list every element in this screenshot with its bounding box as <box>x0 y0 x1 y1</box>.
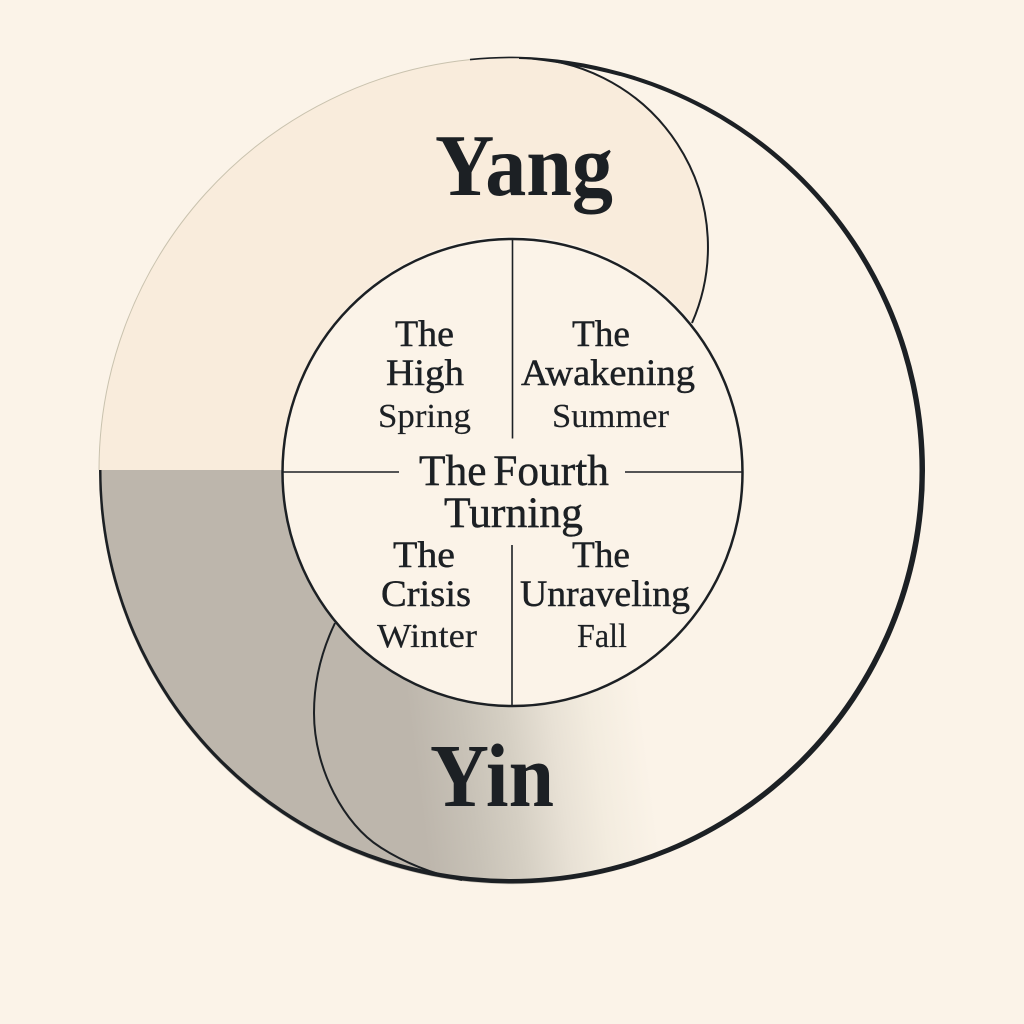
label: The High, Spring: The <box>395 314 454 355</box>
label: The High, Spring: Spring <box>378 398 471 435</box>
outer ring: heavy stroke <box>99 58 925 884</box>
label: The High, Spring: High <box>386 353 465 394</box>
center title: The Fourth Turning: The Fourth <box>419 448 609 495</box>
outer ring: thin upper left edge <box>99 60 470 470</box>
label: The High, Spring <box>378 314 471 435</box>
center title: The Fourth Turning: Turning <box>444 490 583 537</box>
label: The Awakening, Summer: The <box>572 314 630 355</box>
label: The Crisis, Winter: Crisis <box>381 574 471 615</box>
label: The Crisis, Winter: The <box>393 535 455 576</box>
label: The Unraveling, Fall: Fall <box>577 618 627 655</box>
inner circle <box>282 239 742 706</box>
center title: The Fourth Turning <box>419 448 609 537</box>
outer ring: top join <box>470 57 519 60</box>
label: The Awakening, Summer <box>521 314 695 435</box>
outer ring: tapered start of heavy stroke <box>519 57 620 76</box>
panel: yin region <box>99 470 720 884</box>
label: The Unraveling, Fall: Unraveling <box>520 574 690 615</box>
label: The Unraveling, Fall <box>520 535 690 655</box>
panel: yang region <box>99 57 708 470</box>
quadrant dividers <box>283 239 742 706</box>
heading: Yang: Yang <box>435 118 613 215</box>
heading: Yin: Yin <box>430 727 554 826</box>
label: The Crisis, Winter: Winter <box>377 618 478 655</box>
label: The Awakening, Summer: Awakening <box>521 353 695 394</box>
label: The Crisis, Winter <box>377 535 478 655</box>
diagram: yin yang cycle of the four turnings <box>98 56 925 884</box>
label: The Unraveling, Fall: The <box>572 535 630 576</box>
label: The Awakening, Summer: Summer <box>552 398 670 435</box>
yang boundary curve <box>519 58 708 323</box>
yin boundary curve <box>314 623 462 880</box>
